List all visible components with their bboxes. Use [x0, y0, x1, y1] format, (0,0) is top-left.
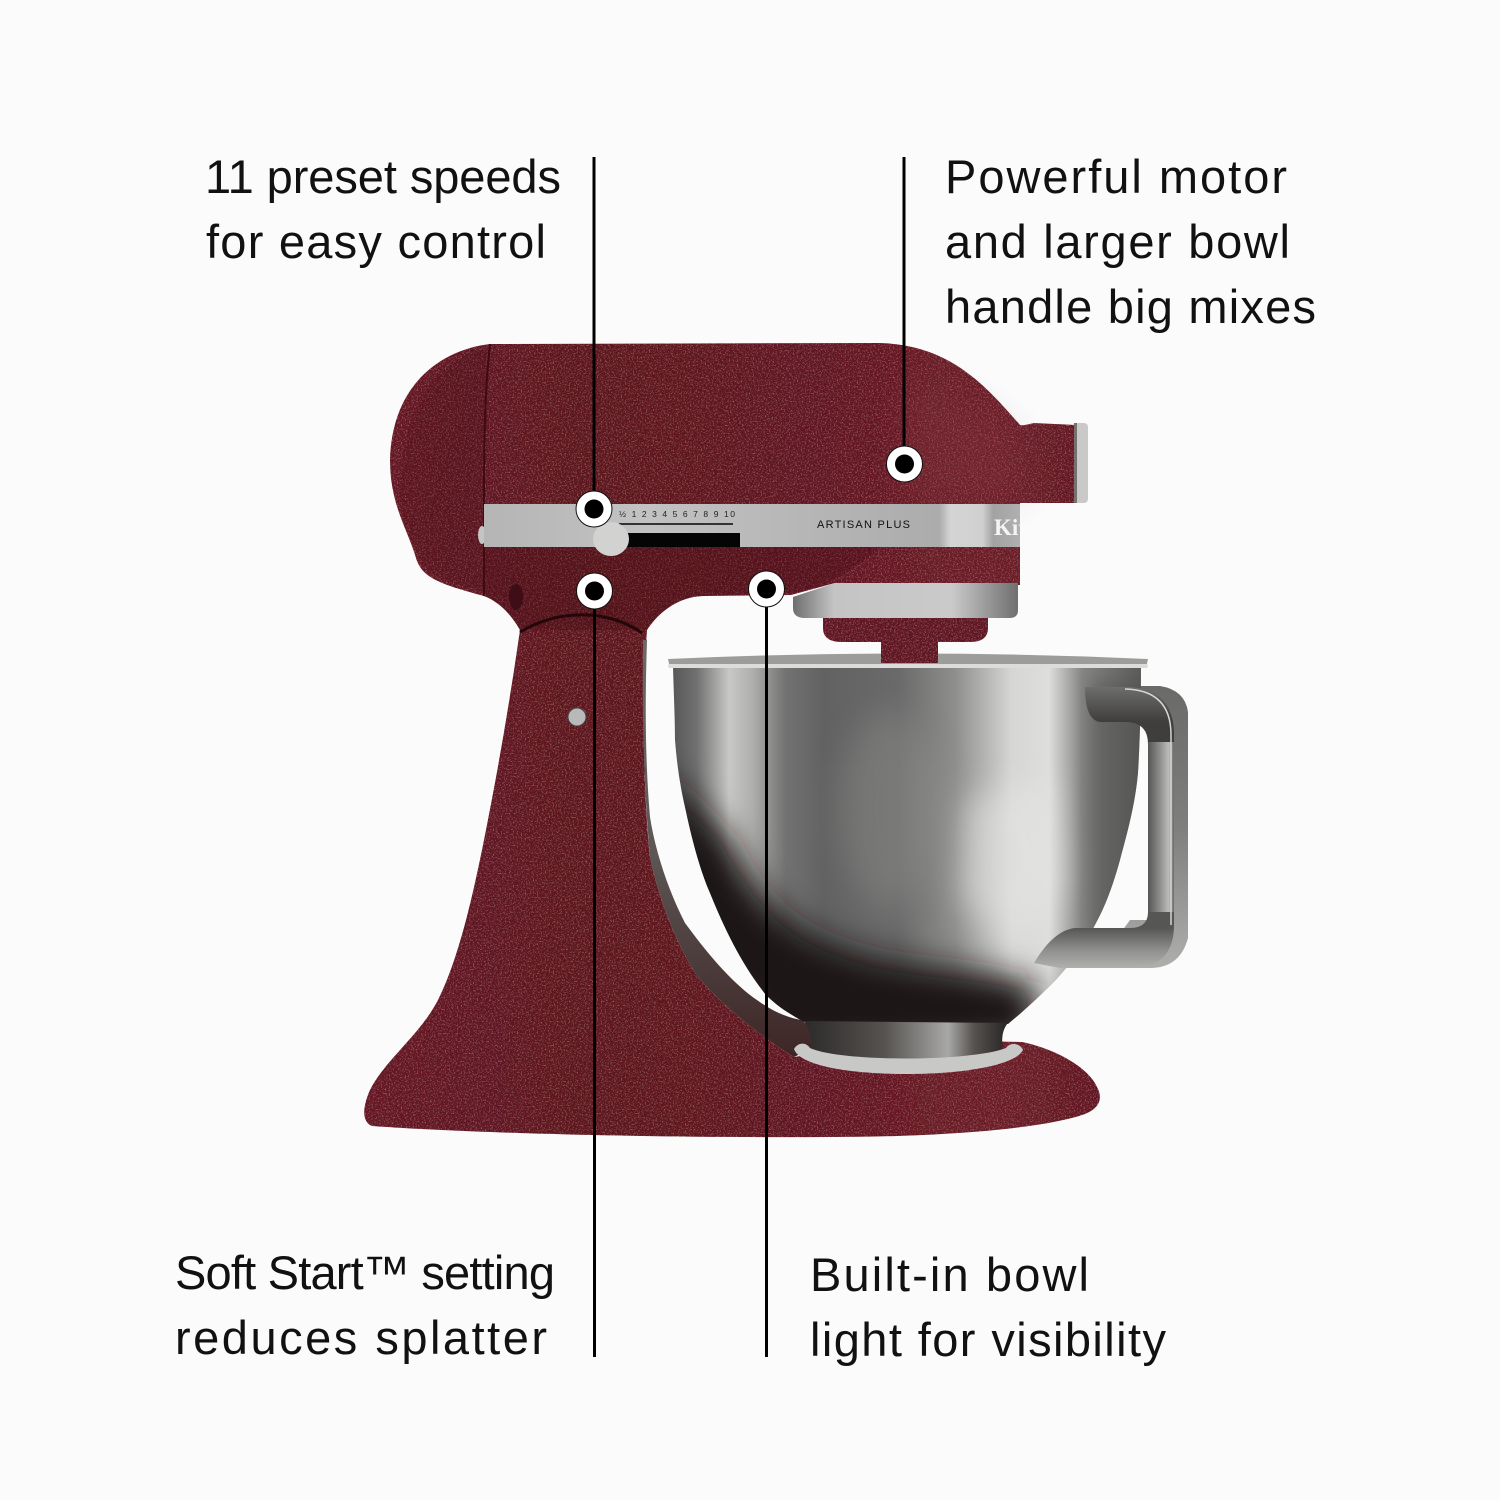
right side shadow [1086, 678, 1141, 928]
callout: bowl light pointer [748, 571, 784, 1357]
text: soft start: Soft Start™ setting [175, 1246, 555, 1299]
mixing bowl [660, 654, 1188, 1074]
text: soft start [175, 1246, 555, 1364]
silver trim band [484, 504, 1026, 556]
column pin [568, 708, 586, 726]
lower dark reflection [660, 770, 1040, 1050]
text: powerful motor: handle big mixes [945, 280, 1316, 333]
text: bowl light: light for visibility [810, 1313, 1166, 1366]
text: powerful motor: and larger bowl [945, 215, 1290, 268]
speed scale line [619, 523, 733, 525]
marker: bowl light [748, 571, 784, 607]
mounting ring [794, 1044, 1023, 1074]
marker: speed control [576, 491, 612, 527]
text: preset speeds: 11 preset speeds [205, 150, 561, 203]
handle top arm [1085, 687, 1174, 744]
centre glow [840, 718, 924, 904]
band pin [478, 526, 486, 544]
callout: soft start pointer [576, 573, 612, 1357]
silver planetary hub [793, 583, 1018, 618]
text: powerful motor: Powerful motor [945, 150, 1287, 203]
speed numbers: ½ 1 2 3 4 5 6 7 8 9 10 [619, 509, 735, 519]
shoulder shadow under the band [484, 547, 880, 630]
marker: soft start [576, 573, 612, 609]
infographic: stand mixer feature callouts [177, 157, 1314, 1366]
speed knob [593, 522, 629, 556]
text: soft start: reduces splatter [175, 1311, 547, 1364]
handle bottom arm [1034, 912, 1174, 968]
mixer body: head, neck, column and base [364, 343, 1100, 1137]
planetary drive [823, 618, 988, 663]
marker: motor [886, 446, 922, 482]
bowl rear rim [668, 654, 1148, 668]
bowl foot [804, 1021, 1008, 1060]
rim lip [668, 664, 1148, 668]
bowl body [673, 667, 1141, 1024]
text: powerful motor [945, 150, 1316, 333]
lower highlight [960, 780, 1062, 950]
handle highlight [1125, 689, 1171, 925]
handle vertical arm [1148, 742, 1174, 914]
text: preset speeds: for easy control [206, 215, 546, 268]
text: bowl light: Built-in bowl [810, 1248, 1089, 1301]
model name: ARTISAN PLUS [817, 519, 910, 531]
bowl-lift reflection strip on the neck [643, 640, 830, 1057]
speed slot [625, 533, 740, 547]
head right highlight [900, 380, 1020, 500]
handle back plate [1095, 686, 1188, 968]
callout: motor pointer [886, 157, 922, 482]
stand mixer illustration [364, 343, 1188, 1137]
column seam arc [520, 615, 642, 633]
brand mark: Kit [994, 515, 1026, 540]
rear pin hole [509, 584, 523, 610]
callout: speed control pointer [576, 157, 612, 527]
text: bowl light [810, 1248, 1166, 1366]
rear cap shading [400, 348, 486, 590]
text: preset speeds [205, 150, 561, 268]
attachment hub cap [1074, 423, 1088, 503]
bowl shading [678, 678, 1141, 1024]
head rear seam [484, 344, 490, 596]
